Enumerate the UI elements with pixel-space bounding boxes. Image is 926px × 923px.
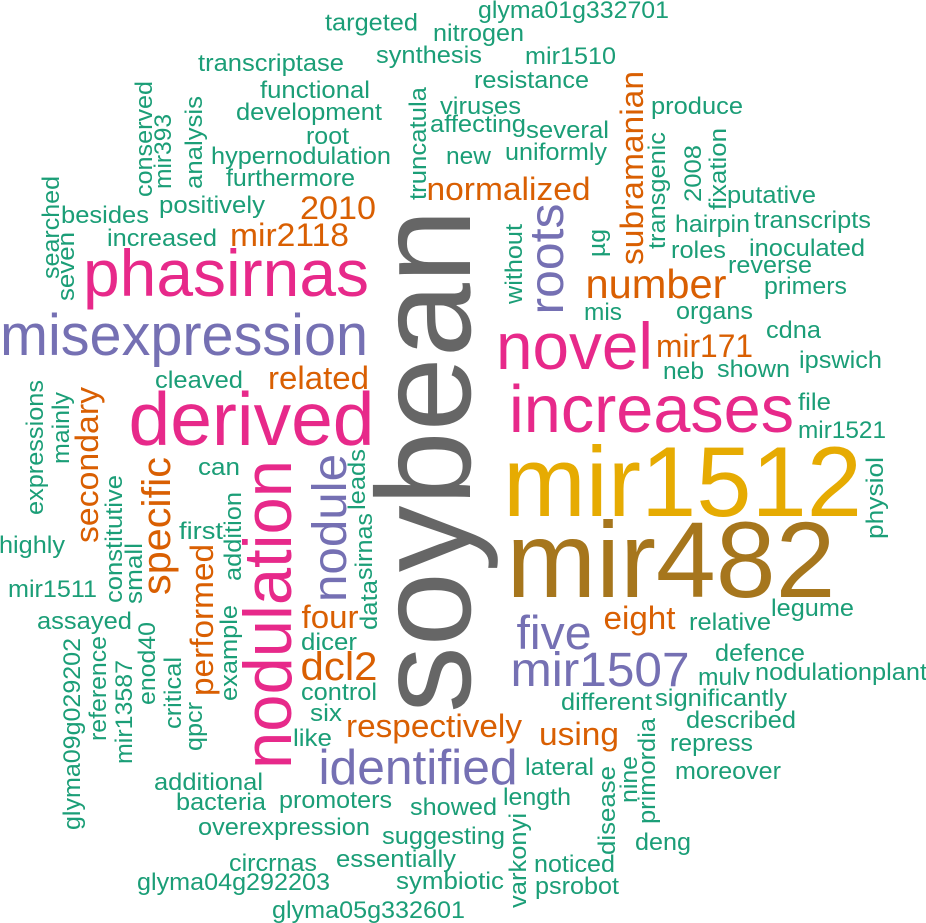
word: ipswich: ipswich [799, 347, 882, 374]
word: critical: critical [160, 657, 187, 729]
word: mainly: mainly [48, 391, 75, 464]
word: overexpression: overexpression [198, 814, 370, 841]
word: assayed: assayed [37, 608, 132, 635]
word: analysis: analysis [181, 96, 208, 189]
word: mulv: mulv [698, 664, 751, 691]
word: misexpression: misexpression [0, 303, 368, 368]
word: mir13587: mir13587 [111, 660, 138, 764]
word: relative: relative [689, 609, 771, 636]
word: promoters: promoters [279, 787, 392, 814]
word: hairpin: hairpin [675, 211, 750, 238]
word: without: without [501, 224, 528, 305]
word: repress: repress [670, 730, 753, 757]
word: mir1507: mir1507 [510, 644, 690, 697]
word: glyma04g292203: glyma04g292203 [137, 869, 330, 896]
word: development: development [236, 99, 382, 126]
word: besides: besides [61, 202, 149, 229]
word: control: control [301, 679, 377, 706]
word: hypernodulation: hypernodulation [211, 143, 391, 170]
word: dcl2: dcl2 [300, 645, 378, 689]
word: length: length [503, 784, 571, 811]
word: noticed: noticed [534, 851, 615, 878]
word: cdna: cdna [766, 317, 821, 344]
word: additional: additional [154, 769, 263, 796]
word: like: like [293, 725, 332, 752]
word: phasirnas: phasirnas [83, 236, 369, 310]
word: qpcr: qpcr [181, 702, 208, 751]
word: addition: addition [220, 492, 247, 581]
word: file: file [798, 389, 831, 416]
word: shown: shown [717, 356, 790, 383]
word: furthermore: furthermore [226, 165, 355, 192]
word: synthesis: synthesis [376, 42, 482, 69]
word: mis: mis [584, 299, 622, 326]
word: transgenic: transgenic [644, 132, 671, 249]
word: roots: roots [521, 204, 574, 314]
word: uniformly: uniformly [505, 139, 608, 166]
word: data: data [356, 580, 383, 630]
word: number: number [586, 261, 726, 307]
word: mir2118: mir2118 [230, 217, 349, 253]
word: nitrogen: nitrogen [433, 20, 524, 47]
word: showed: showed [410, 794, 497, 821]
word: viruses: viruses [440, 93, 521, 120]
word: small: small [121, 543, 148, 604]
word: nodulation: nodulation [230, 460, 306, 769]
word: resistance: resistance [474, 67, 589, 94]
word: transcripts: transcripts [754, 207, 871, 234]
word: physiol: physiol [862, 457, 889, 539]
word: suggesting: suggesting [382, 823, 505, 850]
word: root: root [306, 123, 349, 150]
word: increased: increased [107, 225, 217, 252]
word: secondary: secondary [69, 387, 105, 543]
word: four: four [302, 599, 359, 635]
word: eight: eight [604, 600, 676, 636]
word: targeted: targeted [325, 10, 418, 36]
word: cleaved: cleaved [155, 367, 243, 394]
word: dicer: dicer [301, 629, 357, 656]
word: nine: nine [616, 756, 643, 803]
word: subramanian: subramanian [614, 71, 650, 265]
word: primers: primers [764, 273, 847, 300]
word: lateral: lateral [525, 754, 594, 781]
word: 2010: 2010 [300, 190, 376, 226]
word: transcriptase: transcriptase [198, 50, 344, 77]
word: several: several [526, 117, 609, 144]
word: conserved: conserved [131, 81, 158, 197]
word: disease: disease [594, 766, 621, 855]
word: using: using [539, 716, 619, 752]
word: can: can [198, 454, 240, 481]
word: normalized: normalized [426, 171, 590, 207]
word: specific: specific [135, 457, 179, 595]
word: significantly: significantly [655, 685, 788, 712]
word: roles: roles [671, 237, 726, 264]
word: nodule: nodule [304, 454, 357, 602]
word: different: different [561, 689, 652, 716]
word: new: new [446, 143, 491, 170]
word: varkonyi: varkonyi [505, 813, 532, 908]
word: related: related [268, 360, 369, 396]
word: derived: derived [128, 377, 374, 461]
word: symbiotic: symbiotic [396, 868, 504, 895]
word: example: example [216, 605, 243, 701]
word: mir1512: mir1512 [503, 426, 862, 537]
word: bacteria: bacteria [176, 789, 266, 816]
word: seven: seven [53, 232, 80, 301]
word: sirnas: sirnas [351, 513, 378, 580]
word: truncatula: truncatula [405, 87, 432, 200]
word: constitutive: constitutive [101, 475, 128, 603]
word: primordia: primordia [634, 718, 661, 824]
word: µg: µg [584, 229, 611, 257]
word: mir1511: mir1511 [8, 576, 97, 603]
word: mir171: mir171 [656, 328, 753, 364]
word: first: first [179, 518, 223, 545]
word: mir1510: mir1510 [525, 43, 616, 70]
word: mir482: mir482 [506, 499, 836, 620]
word: nodulationplant: nodulationplant [755, 659, 926, 686]
word: positively: positively [159, 192, 266, 219]
word: enod40: enod40 [134, 622, 161, 705]
word: neb: neb [663, 358, 704, 385]
word: psrobot: psrobot [535, 873, 619, 900]
word: inoculated: inoculated [749, 235, 865, 262]
word: mir393: mir393 [150, 114, 177, 189]
word: produce: produce [651, 93, 743, 120]
word: legume: legume [771, 595, 854, 622]
word: expressions: expressions [22, 380, 49, 515]
word: increases: increases [509, 372, 794, 447]
word: organs: organs [676, 298, 753, 325]
word: six: six [310, 700, 342, 727]
word: defence: defence [715, 640, 805, 667]
word: fixation: fixation [705, 128, 732, 210]
word: soybean: soybean [350, 209, 499, 713]
word: circrnas: circrnas [229, 850, 317, 877]
word: described: described [686, 707, 796, 734]
word: moreover: moreover [675, 758, 781, 785]
word: mir1521: mir1521 [798, 417, 886, 444]
word: affecting: affecting [430, 111, 526, 138]
word: 2008: 2008 [680, 145, 707, 202]
word: deng: deng [635, 829, 691, 856]
word: reference: reference [85, 636, 112, 741]
word: putative: putative [727, 182, 816, 209]
word: novel: novel [496, 309, 653, 383]
word: reverse: reverse [728, 252, 812, 279]
word: glyma09g029202: glyma09g029202 [59, 638, 86, 830]
word: respectively: respectively [346, 708, 522, 744]
word: leads: leads [344, 449, 371, 510]
word: searched: searched [38, 176, 65, 279]
word: highly: highly [0, 532, 66, 559]
word: five: five [516, 606, 592, 659]
word: performed: performed [184, 544, 220, 696]
word: identified: identified [318, 741, 518, 795]
word: essentially: essentially [336, 846, 457, 873]
word: functional: functional [260, 77, 370, 104]
